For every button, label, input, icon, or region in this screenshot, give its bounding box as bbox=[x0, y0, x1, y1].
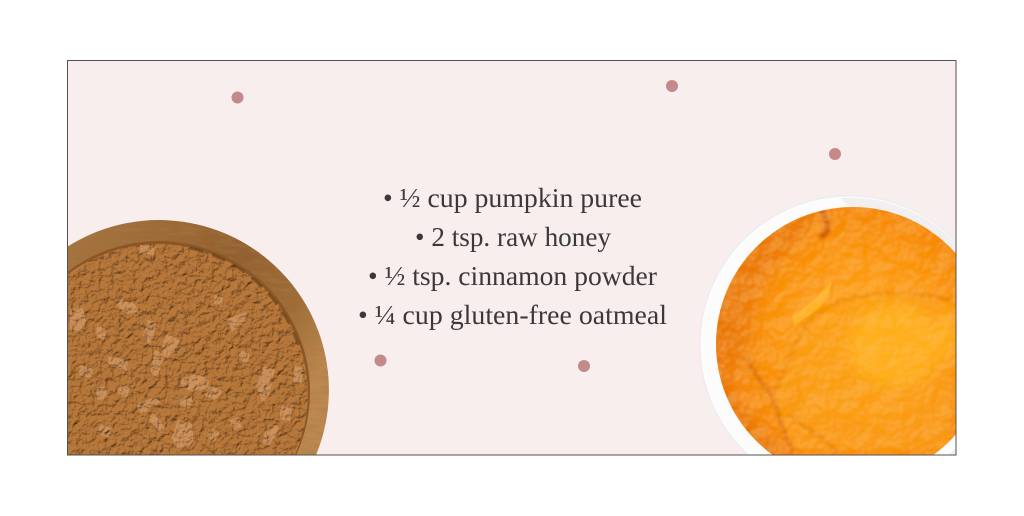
decorative dots bbox=[232, 80, 841, 372]
panel border bbox=[68, 60, 956, 455]
powder rim shadow bbox=[190, 248, 300, 350]
ingredient: raw honey: • 2 tsp. raw honey bbox=[415, 222, 612, 252]
ingredient: gluten-free oatmeal: • ¼ cup gluten-free oatmeal bbox=[358, 300, 667, 330]
ingredient: cinnamon powder: • ½ tsp. cinnamon powder bbox=[368, 261, 657, 291]
panel background bbox=[68, 61, 956, 455]
ingredient: pumpkin puree: • ½ cup pumpkin puree bbox=[383, 183, 642, 213]
image: bowl of pumpkin puree bbox=[699, 195, 956, 454]
puree crease lines bbox=[748, 212, 950, 452]
puree shaded folds bbox=[728, 220, 820, 439]
puree lower lobe bbox=[774, 297, 950, 450]
puree highlights bbox=[849, 303, 958, 387]
ingredient list bbox=[358, 183, 667, 330]
puree bright ridge bbox=[792, 280, 832, 325]
image: bowl of cinnamon powder bbox=[68, 220, 329, 455]
puree bbox=[710, 200, 960, 460]
